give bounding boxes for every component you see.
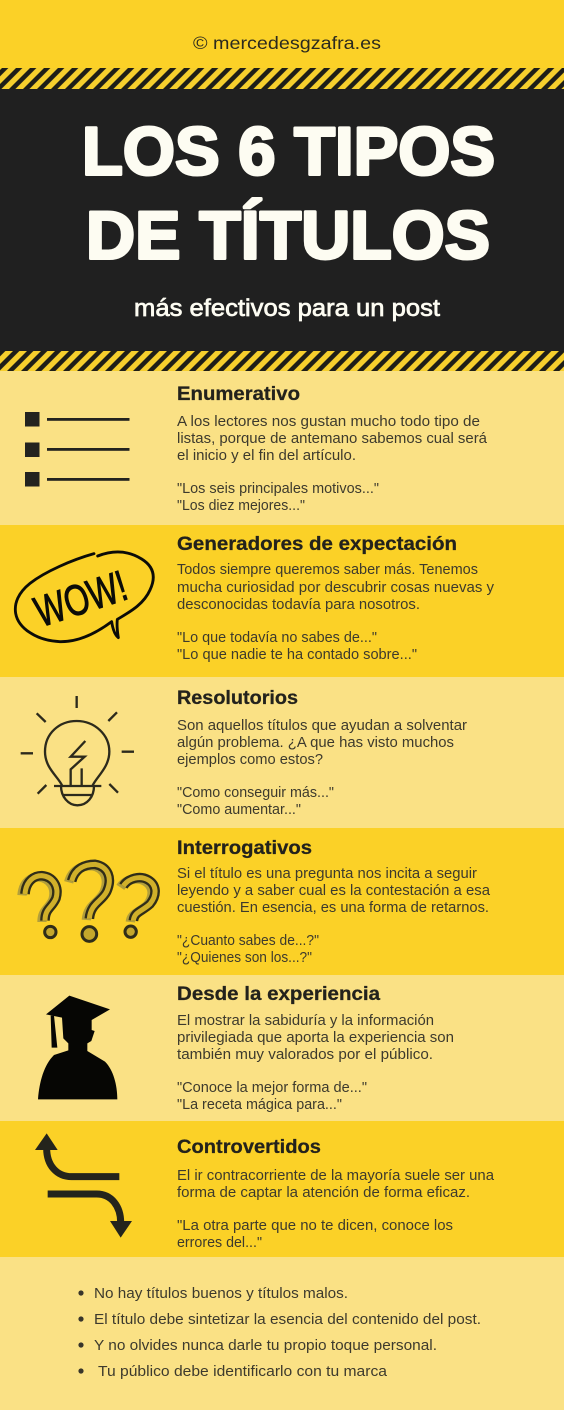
description: el inicio y el fin del artículo. xyxy=(177,447,356,464)
heading: Desde la experiencia: Desde la experiencia xyxy=(177,984,380,1005)
description: forma de captar la atención de forma eficaz. xyxy=(177,1184,470,1201)
description: algún problema. ¿A que has visto muchos xyxy=(177,734,454,751)
description: "La receta mágica para..." xyxy=(177,1096,342,1113)
description: El mostrar la sabiduría y la información xyxy=(177,1012,434,1029)
description: privilegiada que aporta la experiencia son xyxy=(177,1029,454,1046)
icon: question marks xyxy=(22,864,155,941)
description: "Lo que todavía no sabes de..." xyxy=(177,629,377,646)
heading: Controvertidos: Controvertidos xyxy=(177,1137,321,1158)
description: Son aquellos títulos que ayudan a solventar xyxy=(177,717,467,734)
icon: wow speech bubble: WOW! xyxy=(29,562,133,637)
description: El ir contracorriente de la mayoría suele ser una xyxy=(177,1167,495,1184)
panel: closing tips xyxy=(0,1257,564,1410)
description: también muy valorados por el público. xyxy=(177,1046,433,1063)
description xyxy=(177,561,494,663)
bullet list: No hay títulos buenos y títulos malos. xyxy=(94,1285,348,1302)
bullet list: Y no olvides nunca darle tu propio toque personal. xyxy=(94,1337,437,1354)
description: "¿Cuanto sabes de...?" xyxy=(177,932,319,949)
description xyxy=(177,865,491,966)
heading: Generadores de expectación: Generadores de expectación xyxy=(177,534,457,555)
description: "Los seis principales motivos..." xyxy=(177,480,379,497)
panel: Generadores de expectación xyxy=(0,525,564,677)
main title: LOS 6 TIPOS xyxy=(82,114,495,190)
icon: light bulb xyxy=(21,696,134,805)
description xyxy=(177,717,467,818)
description xyxy=(177,1012,454,1113)
bullet list: El título debe sintetizar la esencia del contenido del post. xyxy=(94,1311,481,1328)
description: Si el título es una pregunta nos incita a seguir xyxy=(177,865,477,882)
icon: graduate silhouette xyxy=(38,996,117,1099)
description: desconocidas todavía para nosotros. xyxy=(177,596,420,613)
description: errores del..." xyxy=(177,1234,262,1251)
description xyxy=(177,413,488,514)
heading: Enumerativo: Enumerativo xyxy=(177,384,300,405)
description: listas, porque de antemano sabemos cual será xyxy=(177,430,488,447)
panel: Enumerativo xyxy=(0,371,564,525)
copyright credit: © mercedesgzafra.es xyxy=(193,33,381,53)
bullet list: Tu público debe identificarlo con tu marca xyxy=(98,1363,388,1380)
description: "¿Quienes son los...?" xyxy=(177,949,312,966)
description: leyendo y a saber cual es la contestación a esa xyxy=(177,882,491,899)
top banner xyxy=(0,0,564,68)
heading: Resolutorios: Resolutorios xyxy=(177,688,298,709)
description: Todos siempre queremos saber más. Tenemos xyxy=(177,561,478,578)
header panel xyxy=(0,68,564,371)
description: "Lo que nadie te ha contado sobre..." xyxy=(177,646,417,663)
description: ejemplos como estos? xyxy=(177,751,323,768)
panel: Controvertidos xyxy=(0,1121,564,1257)
panel: Resolutorios xyxy=(0,677,564,828)
description: "La otra parte que no te dicen, conoce los xyxy=(177,1217,453,1234)
bullet list xyxy=(78,1285,481,1380)
description: "Como aumentar..." xyxy=(177,801,301,818)
description: "Los diez mejores..." xyxy=(177,497,305,514)
main title: DE TÍTULOS xyxy=(86,198,490,274)
panel: Interrogativos xyxy=(0,828,564,975)
heading: Interrogativos: Interrogativos xyxy=(177,838,312,859)
description: A los lectores nos gustan mucho todo tipo de xyxy=(177,413,480,430)
description: mucha curiosidad por descubrir cosas nuevas y xyxy=(177,579,494,596)
description: cuestión. En esencia, es una forma de retarnos. xyxy=(177,899,489,916)
subtitle: más efectivos para un post xyxy=(134,295,440,322)
icon: opposing arrows xyxy=(35,1133,132,1238)
icon: list xyxy=(25,412,130,486)
description: "Como conseguir más..." xyxy=(177,784,334,801)
description: "Conoce la mejor forma de..." xyxy=(177,1079,367,1096)
main title xyxy=(82,114,495,274)
panel: Desde la experiencia xyxy=(0,975,564,1121)
description xyxy=(177,1167,495,1251)
